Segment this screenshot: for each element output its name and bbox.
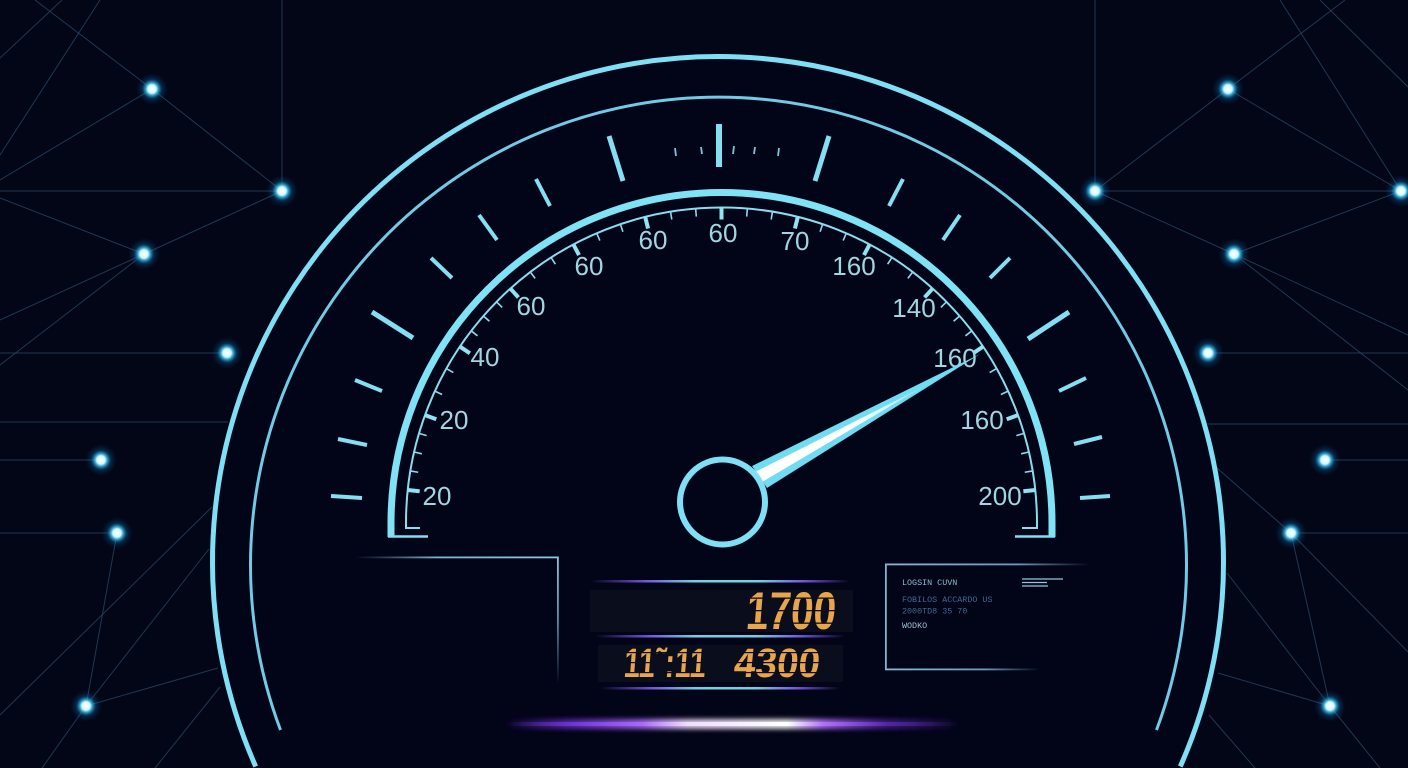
dial numbers: 160	[933, 343, 977, 373]
readout rule: bottom	[600, 687, 840, 690]
dial numbers: 60	[709, 218, 737, 248]
readout rule: top	[590, 580, 850, 582]
panel line 1: FOBILOS ACCARDO US	[902, 595, 992, 605]
dial numbers: 200	[978, 481, 1022, 511]
panel line 3: WODKO	[902, 621, 927, 631]
needle highlight	[755, 388, 921, 482]
dial numbers: 20	[423, 481, 451, 511]
inner scale arc	[406, 208, 1037, 528]
panel frame	[885, 564, 1090, 670]
dial numbers: 40	[471, 342, 499, 372]
left bracket panel	[355, 556, 559, 684]
readout background: bottom	[598, 645, 843, 682]
dial numbers: 20	[440, 405, 468, 435]
dial numbers: 60	[575, 251, 603, 281]
dial numbers: 140	[892, 293, 936, 323]
digital readouts	[590, 580, 853, 690]
dial numbers: 70	[781, 226, 809, 256]
main dial arc	[391, 192, 1052, 537]
panel line 2: 2000TD8 35 70	[902, 606, 967, 616]
outer tick marks	[331, 124, 1110, 498]
purple light beam	[505, 719, 960, 729]
network: left	[0, 0, 282, 768]
inner scale minor ticks	[410, 209, 1033, 472]
readout rule: middle	[595, 635, 845, 638]
network: right	[1095, 0, 1408, 768]
info panel	[885, 564, 1090, 670]
readout value: bottom right: 4300	[732, 641, 822, 686]
dial numbers: 160	[960, 405, 1004, 435]
needle hub	[680, 460, 765, 544]
readout value: top: 1700	[744, 581, 838, 640]
needle	[752, 354, 980, 488]
outer ring	[212, 57, 1223, 767]
dial numbers: 60	[517, 291, 545, 321]
dial numbers: 60	[639, 225, 667, 255]
panel mini bars	[1022, 579, 1063, 586]
segment cuts	[620, 598, 840, 673]
inner scale major ticks	[408, 208, 1035, 491]
main arc feet	[388, 535, 1055, 538]
readout value: bottom left: 11˜:11	[622, 640, 708, 686]
second ring arc	[251, 97, 1187, 730]
dial numbers	[423, 218, 1022, 511]
needle body	[752, 354, 980, 488]
dial numbers: 160	[832, 251, 876, 281]
readout background: top	[590, 590, 853, 632]
panel heading: LOGSIN CUVN	[902, 578, 957, 588]
